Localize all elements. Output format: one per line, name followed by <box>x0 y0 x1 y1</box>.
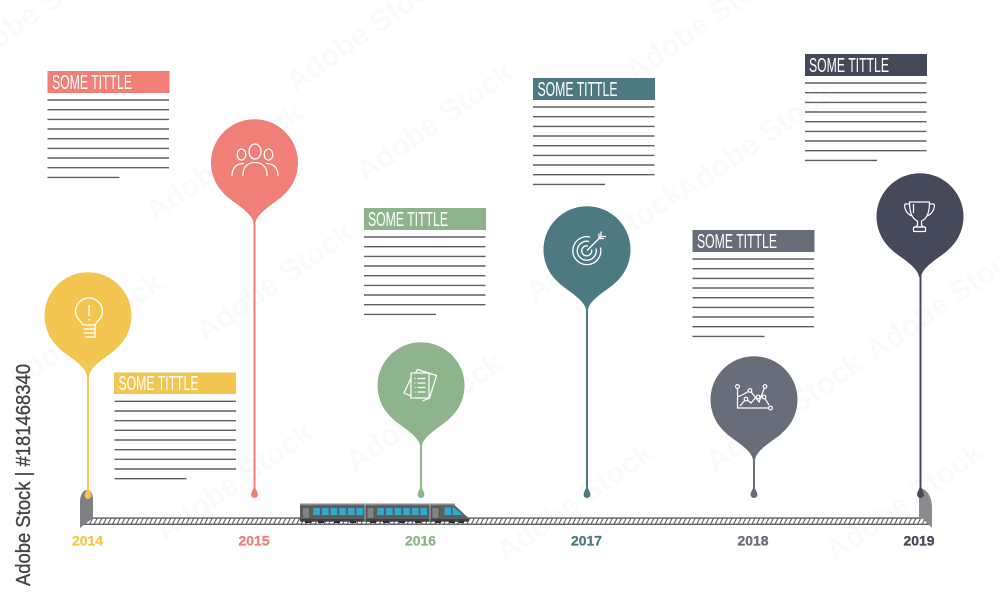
text block: 2014: SOME TITTLE <box>118 373 198 395</box>
right buffer stop <box>919 488 932 528</box>
watermark pattern: Adobe Stock <box>520 176 689 308</box>
year labels <box>72 532 935 548</box>
icon: people <box>232 144 278 176</box>
watermark pattern: Adobe Stock <box>700 346 869 478</box>
icon: target <box>573 232 606 265</box>
watermark pattern: Adobe Stock <box>670 76 839 208</box>
watermark pattern: Adobe Stock <box>820 436 989 568</box>
pin 2014 with lightbulb icon <box>45 272 132 499</box>
year 2015: 2015 <box>238 532 270 548</box>
train <box>300 504 469 523</box>
text block: 2019: SOME TITTLE <box>809 55 889 77</box>
year 2017: 2017 <box>571 532 602 548</box>
year 2019: 2019 <box>904 532 935 548</box>
pin 2018 with chart icon <box>710 356 798 498</box>
text block: 2015 <box>48 71 170 177</box>
year 2016: 2016 <box>405 532 436 548</box>
watermark pattern: Adobe Stock <box>140 96 309 228</box>
year 2018: 2018 <box>738 532 769 548</box>
icon: documents <box>404 370 436 401</box>
text block: 2019 <box>805 54 927 160</box>
watermark pattern: Adobe Stock <box>0 266 169 398</box>
text block: 2015: SOME TITTLE <box>52 72 132 94</box>
left buffer stop <box>80 490 93 528</box>
icon: lightbulb <box>76 298 102 337</box>
pin 2015 with people icon <box>211 119 298 498</box>
text block: 2016: SOME TITTLE <box>368 209 448 231</box>
year 2014: 2014 <box>72 532 103 548</box>
text block: 2017 <box>533 78 655 184</box>
icon: trophy <box>905 202 934 232</box>
pin 2016 with documents icon <box>378 342 464 498</box>
text block: 2018: SOME TITTLE <box>697 231 777 253</box>
text block: 2014 <box>114 372 236 479</box>
pin 2017 with target icon <box>544 206 630 498</box>
side credit text: Adobe Stock | #181468340 <box>13 364 35 586</box>
watermark pattern: Adobe Stock <box>490 436 659 568</box>
pin 2019 with trophy icon <box>876 173 964 498</box>
watermark pattern: Adobe Stock <box>340 346 509 478</box>
text block: 2018 <box>692 230 814 336</box>
watermark pattern: Adobe Stock <box>150 416 319 548</box>
railway track <box>80 517 932 525</box>
text block: 2017: SOME TITTLE <box>538 79 618 101</box>
watermark pattern: Adobe Stock <box>190 216 359 348</box>
icon: line chart <box>736 385 772 410</box>
text block: 2016 <box>364 208 486 314</box>
watermark pattern: Adobe Stock <box>350 56 519 188</box>
